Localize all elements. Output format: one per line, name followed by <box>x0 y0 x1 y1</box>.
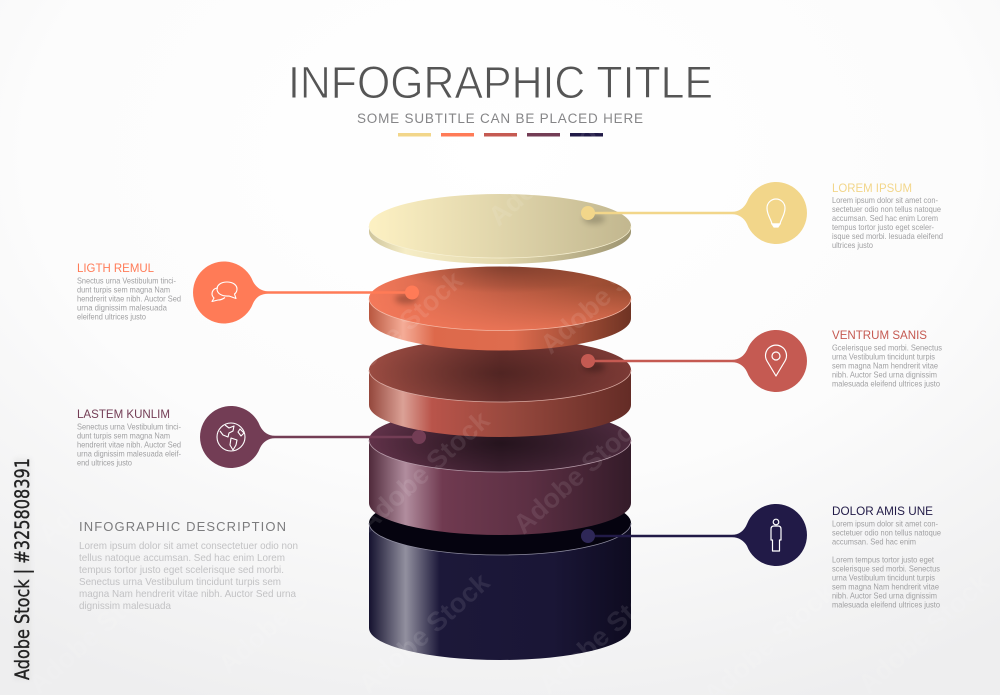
watermark: Adobe Stock <box>683 56 826 190</box>
watermark: Adobe Stock <box>178 401 321 535</box>
text: lorem ipsum: isque sed morbi. lesuada eleifend <box>832 232 943 241</box>
text: infographic description: tempus tortor justo eget scelerisque sed morbi. <box>79 565 284 576</box>
subtitle: SOME SUBTITLE CAN BE PLACED HERE <box>357 111 643 126</box>
watermark: Adobe Stock <box>823 76 966 210</box>
text: infographic description: dignissim malesuada <box>79 601 171 612</box>
text: dolor amis une: DOLOR AMIS UNE <box>832 504 933 518</box>
text: dolor amis une <box>832 504 941 610</box>
text: infographic description: Senectus urna Vestibulum tincidunt turpis sem <box>79 577 281 588</box>
icon: light bulb <box>767 199 785 227</box>
text: dolor amis une: sectetuer odio non tellus natoque <box>832 528 941 538</box>
text: ventrum sanis: urna Vestibulum tincidunt turpis <box>832 352 935 362</box>
watermark: Adobe Stock <box>203 216 346 350</box>
text: infographic description <box>79 519 298 612</box>
stock id label: Adobe Stock | #325808391 <box>11 458 34 680</box>
text: ligth remul: hendrerit vitae nibh. Auctor Sed <box>77 294 181 304</box>
text: infographic description: tellus natoque accumsan. Sed hac enim Lorem <box>79 553 285 564</box>
watermark: Adobe Stock <box>535 226 678 360</box>
text: lorem ipsum: ultrices justo <box>832 241 873 250</box>
watermark: Adobe Stock <box>163 91 306 225</box>
text: lastem kunlim: Senectus urna Vestibulum tinci- <box>77 422 181 432</box>
text: lorem ipsum: LOREM IPSUM <box>832 181 912 195</box>
watermark: Adobe Stock <box>843 406 986 540</box>
layer 1: cream disc <box>369 194 631 264</box>
text: dolor amis une: urna Vestibulum tincidunt turpis <box>832 574 935 582</box>
watermark: Adobe Stock <box>843 226 986 360</box>
text: dolor amis une: accumsan. Sed hac enim <box>832 538 916 546</box>
icon: globe <box>217 423 245 451</box>
text: lorem ipsum: tempus tortor justo eget sceler- <box>832 223 934 232</box>
callout: lorem ipsum connector <box>581 182 807 244</box>
watermark: Adobe Stock <box>353 404 496 538</box>
callout: dolor amis une connector <box>581 504 807 566</box>
watermark: Adobe Stock <box>213 546 356 680</box>
text: ventrum sanis: sem magna Nam hendrerit vitae <box>832 362 938 370</box>
text: dolor amis une: scelerisque sed morbi. Senectus <box>832 564 940 574</box>
title: INFOGRAPHIC TITLE <box>288 57 713 108</box>
watermark: Adobe Stock <box>0 266 141 400</box>
callout: ventrum sanis connector <box>581 330 807 392</box>
text: lastem kunlim: urna dignissim malesuada eleif- <box>77 450 181 458</box>
watermark: Adobe Stock <box>33 416 176 550</box>
text: lorem ipsum <box>832 181 943 250</box>
watermark: Adobe Stock <box>673 266 816 400</box>
text: lorem ipsum: sectetuer odio non tellus natoque <box>832 205 941 214</box>
text: dolor amis une: sem magna Nam hendrerit vitae <box>832 582 939 592</box>
text: lastem kunlim: end ultrices justo <box>77 458 132 468</box>
text: dolor amis une: malesuada eleifend ultrices justo <box>832 600 940 610</box>
watermark: Adobe Stock <box>33 51 176 185</box>
text: lastem kunlim <box>77 407 181 468</box>
text: ligth remul: urna dignissim malesuada <box>77 304 167 312</box>
text: lastem kunlim: LASTEM KUNLIM <box>77 407 170 421</box>
text: infographic description: magna Nam hendrerit vitae nibh. Auctor Sed urna <box>79 589 296 600</box>
watermark: Adobe Stock <box>713 406 856 540</box>
callout: ligth remul connector <box>193 262 419 324</box>
text: infographic description: INFOGRAPHIC DESCRIPTION <box>79 519 286 534</box>
text: ligth remul: Snectus urna Vestibulum tinci- <box>77 276 176 286</box>
text: dolor amis une: Lorem tempus tortor justo eget <box>832 556 935 564</box>
text: ventrum sanis: nibh. Auctor Sed urna dignissim <box>832 370 937 380</box>
text: ventrum sanis <box>832 328 942 388</box>
text: ligth remul <box>77 261 181 322</box>
text: ligth remul: eleifend ultrices justo <box>77 312 146 322</box>
text: ligth remul: LIGTH REMUL <box>77 261 154 275</box>
icon: person <box>771 519 781 551</box>
layer 3: brick cylinder <box>369 338 631 437</box>
text: ventrum sanis: malesuada eleifend ultrices justo <box>832 380 940 388</box>
text: dolor amis une: nibh. Auctor Sed urna dignissim <box>832 592 937 600</box>
icon: map pin <box>766 345 787 376</box>
layer 4: plum cylinder <box>369 408 631 535</box>
watermark: Adobe Stock <box>483 98 626 232</box>
text: ventrum sanis: Gcelerisque sed morbi. Senectus <box>832 344 942 352</box>
watermark: Adobe Stock <box>508 406 651 540</box>
watermark: Adobe Stock <box>326 264 469 398</box>
text: ventrum sanis: VENTRUM SANIS <box>832 328 927 342</box>
text: infographic description: Lorem ipsum dolor sit amet consectetuer odio non <box>79 541 298 552</box>
callout: lastem kunlim connector <box>200 406 426 468</box>
text: lorem ipsum: Lorem ipsum dolor sit amet con- <box>832 196 938 205</box>
icon: speech bubbles <box>212 282 237 302</box>
layer 5: navy cylinder <box>369 491 631 660</box>
text: lastem kunlim: dunt turpis sem magna Nam <box>77 432 170 440</box>
colour key bars <box>398 133 603 136</box>
layer 2: coral disc <box>369 266 631 350</box>
text: ligth remul: dunt turpis sem magna Nam <box>77 286 170 294</box>
text: lorem ipsum: accumsan. Sed hac enim Lorem <box>832 214 938 223</box>
text: lastem kunlim: hendrerit vitae nibh. Auctor Sed <box>77 440 181 450</box>
text: dolor amis une: Lorem ipsum dolor sit amet con- <box>832 520 938 528</box>
